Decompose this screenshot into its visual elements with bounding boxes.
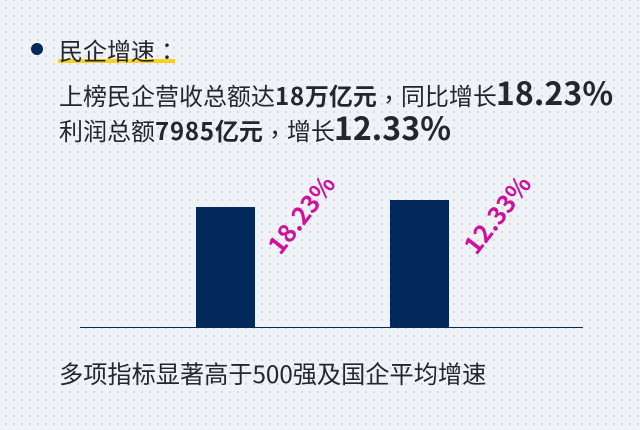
footer text: 多项指标显著高于500强及国企平均增速 (59, 355, 486, 390)
bullet dot (31, 43, 43, 55)
text line: revenue: 上榜民企营收总额达18万亿元，同比增长18.23% (59, 69, 613, 115)
label: 18.23%: 18.23% (258, 167, 343, 261)
heading underline (58, 59, 175, 63)
bar: profit growth (390, 200, 449, 328)
text line: profit: 利润总额7985亿元，增长12.33% (59, 104, 451, 150)
label: 12.33%: 12.33% (454, 167, 539, 261)
chart baseline (80, 327, 583, 328)
bar chart (80, 167, 583, 328)
bar: revenue growth (196, 207, 255, 328)
heading: 民企增速： (59, 32, 179, 67)
